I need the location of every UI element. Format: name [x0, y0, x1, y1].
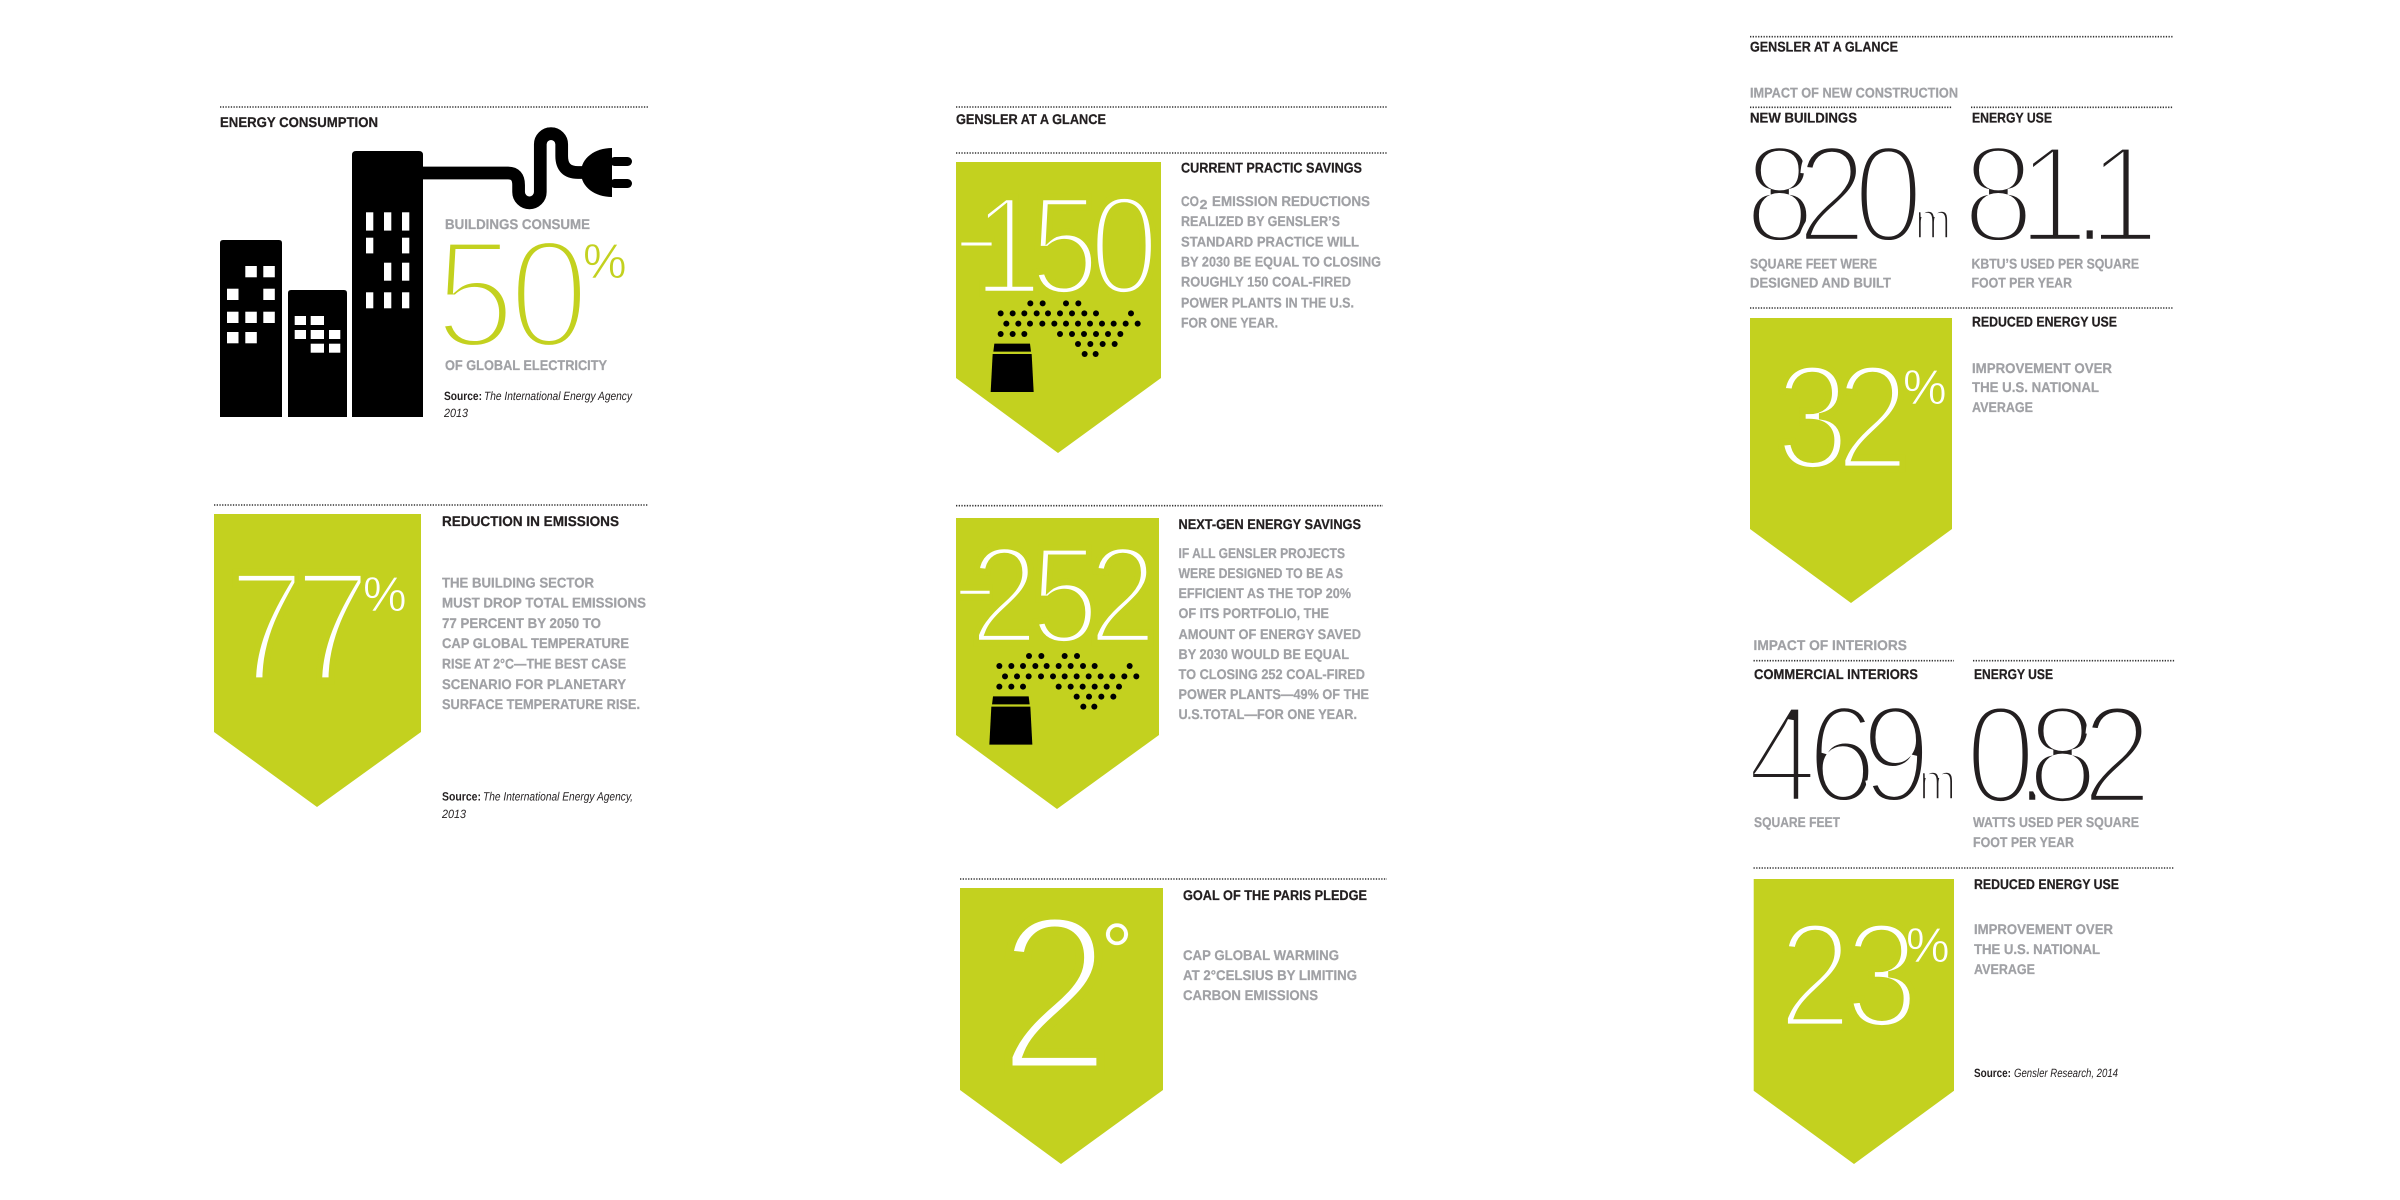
body text: 2	[1200, 197, 1208, 212]
body text: RISE AT 2°C—THE BEST CASE	[442, 655, 626, 671]
heading: energy use: ENERGY USE	[1972, 110, 2052, 126]
heading: energy consumption: ENERGY CONSUMPTION	[220, 114, 378, 130]
body text	[1974, 921, 2113, 977]
heading: gensler at a glance: GENSLER AT A GLANCE	[956, 111, 1106, 127]
panel: goal of the paris pledge	[960, 870, 1387, 1164]
shield: 32 percent: 32	[1776, 333, 1909, 501]
caption: kbtu: FOOT PER YEAR	[1972, 274, 2072, 290]
body text: REALIZED BY GENSLER’S	[1181, 213, 1340, 229]
body text: AT 2°CELSIUS BY LIMITING	[1183, 967, 1357, 983]
shield: minus 252	[956, 500, 1159, 809]
body text: CAP GLOBAL WARMING	[1183, 947, 1339, 963]
body text: POWER PLANTS IN THE U.S.	[1181, 295, 1354, 311]
source note: The International Energy Agency	[484, 389, 633, 403]
caption: watts	[1973, 814, 2139, 850]
source note: 2013	[443, 406, 468, 420]
panel: impact of interiors	[1747, 637, 2174, 1164]
shield: minus 150: 150	[973, 166, 1159, 324]
body text: SCENARIO FOR PLANETARY	[442, 676, 627, 692]
heading: current practic savings: CURRENT PRACTIC SAVINGS	[1181, 160, 1362, 176]
body text: BY 2030 WOULD BE EQUAL	[1178, 646, 1349, 662]
caption: square feet	[1750, 255, 1891, 290]
heading: next-gen energy savings: NEXT-GEN ENERGY SAVINGS	[1178, 516, 1361, 532]
body text	[1181, 193, 1381, 331]
subheading: impact of interiors: IMPACT OF INTERIORS	[1754, 637, 1907, 653]
stat: 0.82: 0.82	[1966, 676, 2152, 833]
shield: 77 percent: %	[363, 568, 407, 622]
heading: commercial interiors: COMMERCIAL INTERIORS	[1754, 666, 1918, 682]
body text: CO	[1181, 193, 1199, 209]
shield: minus 150: –	[960, 152, 993, 311]
stat: 50 percent: %	[583, 235, 627, 289]
body text	[1178, 545, 1369, 722]
shield: 2 degrees: 2	[998, 870, 1111, 1118]
heading: reduced energy use: REDUCED ENERGY USE	[1972, 314, 2117, 330]
source note: Gensler Research, 2014	[2014, 1066, 2118, 1080]
body text: MUST DROP TOTAL EMISSIONS	[442, 594, 646, 610]
body text: IMPROVEMENT OVER	[1972, 360, 2112, 376]
shield: 23 percent: %	[1906, 919, 1950, 973]
stat: 50 percent: 50	[435, 208, 589, 380]
body text: FOR ONE YEAR.	[1181, 315, 1278, 331]
body text: ROUGHLY 150 COAL-FIRED	[1181, 274, 1351, 290]
caption: kbtu: KBTU’S USED PER SQUARE	[1972, 255, 2139, 271]
shield: 32 percent	[1750, 318, 1952, 603]
body text	[1183, 947, 1357, 1003]
body text: WERE DESIGNED TO BE AS	[1178, 565, 1343, 581]
shield: 2 degrees: °	[1101, 907, 1133, 996]
source note	[1974, 1066, 2118, 1080]
body text: BY 2030 BE EQUAL TO CLOSING	[1181, 254, 1381, 270]
body text: IMPROVEMENT OVER	[1974, 921, 2113, 937]
shield: 32 percent: %	[1903, 361, 1947, 415]
body text: TO CLOSING 252 COAL-FIRED	[1178, 666, 1365, 682]
source note	[441, 790, 633, 821]
shield: 77 percent	[214, 514, 421, 807]
body text: U.S.TOTAL—FOR ONE YEAR.	[1178, 706, 1357, 722]
shield: minus 252: –	[959, 500, 991, 658]
shield: 23 percent	[1754, 879, 1954, 1164]
caption: square feet: SQUARE FEET WERE	[1750, 255, 1877, 271]
body text: AVERAGE	[1972, 399, 2033, 415]
heading: goal of the paris pledge: GOAL OF THE PARIS PLEDGE	[1183, 887, 1367, 903]
body text: CARBON EMISSIONS	[1183, 987, 1318, 1003]
source note: Source:	[442, 790, 481, 804]
icon: buildings plugged in	[220, 134, 632, 417]
body text: AMOUNT OF ENERGY SAVED	[1178, 626, 1361, 642]
heading: gensler at a glance: GENSLER AT A GLANCE	[1750, 39, 1898, 55]
caption: watts: FOOT PER YEAR	[1973, 834, 2074, 850]
stat: 820 million: 820	[1745, 117, 1923, 272]
body text: CAP GLOBAL TEMPERATURE	[442, 635, 629, 651]
source note: The International Energy Agency,	[483, 790, 633, 804]
body text: EFFICIENT AS THE TOP 20%	[1178, 585, 1351, 601]
source note: 2013	[441, 807, 466, 821]
heading: reduction in emissions: REDUCTION IN EMISSIONS	[442, 513, 619, 529]
shield: minus 252: 252	[970, 518, 1157, 673]
body text: THE U.S. NATIONAL	[1972, 379, 2099, 395]
shield: 23 percent: 23	[1778, 891, 1919, 1059]
caption: square feet: SQUARE FEET	[1754, 814, 1840, 830]
caption: kbtu	[1972, 255, 2139, 290]
body text: IF ALL GENSLER PROJECTS	[1178, 545, 1345, 561]
body text: OF ITS PORTFOLIO, THE	[1178, 605, 1329, 621]
icon: coal plant with smoke	[991, 300, 1141, 392]
stat: 81.1: 81.1	[1963, 117, 2159, 272]
text: of global electricity: OF GLOBAL ELECTRICITY	[445, 357, 608, 373]
body text: EMISSION REDUCTIONS	[1212, 193, 1370, 209]
shield: minus 150	[956, 152, 1161, 453]
caption: square feet: DESIGNED AND BUILT	[1750, 274, 1891, 290]
stat: 469 million: 469	[1747, 677, 1931, 832]
source note	[443, 389, 633, 420]
panel: impact of new construction	[1745, 37, 2173, 603]
heading: new buildings: NEW BUILDINGS	[1750, 110, 1857, 126]
body text: 77 PERCENT BY 2050 TO	[442, 615, 601, 631]
heading: reduced energy use: REDUCED ENERGY USE	[1974, 876, 2119, 892]
body text: POWER PLANTS—49% OF THE	[1178, 686, 1369, 702]
panel: next-gen energy savings	[956, 500, 1383, 809]
caption: watts: WATTS USED PER SQUARE	[1973, 814, 2139, 830]
source note: Source:	[1974, 1066, 2011, 1080]
body text	[1972, 360, 2112, 415]
body text	[442, 574, 646, 712]
panel: energy consumption	[220, 107, 648, 420]
body text: THE BUILDING SECTOR	[442, 574, 594, 590]
panel: reduction in emissions	[214, 505, 648, 821]
subheading: impact of new construction: IMPACT OF NEW CONSTRUCTION	[1750, 85, 1958, 101]
stat: 469 million: m	[1919, 754, 1956, 812]
body text: THE U.S. NATIONAL	[1974, 941, 2100, 957]
icon: coal plant with smoke	[989, 653, 1139, 745]
shield: 2 degrees	[960, 870, 1163, 1164]
body text: AVERAGE	[1974, 961, 2035, 977]
body text: STANDARD PRACTICE WILL	[1181, 234, 1359, 250]
source note: Source:	[444, 389, 482, 403]
stat: 820 million: m	[1915, 192, 1951, 250]
body text: SURFACE TEMPERATURE RISE.	[442, 696, 640, 712]
shield: 77 percent: 77	[229, 539, 370, 715]
panel: current practice savings	[956, 107, 1387, 453]
text: buildings consume: BUILDINGS CONSUME	[445, 216, 590, 232]
heading: energy use: ENERGY USE	[1974, 666, 2053, 682]
